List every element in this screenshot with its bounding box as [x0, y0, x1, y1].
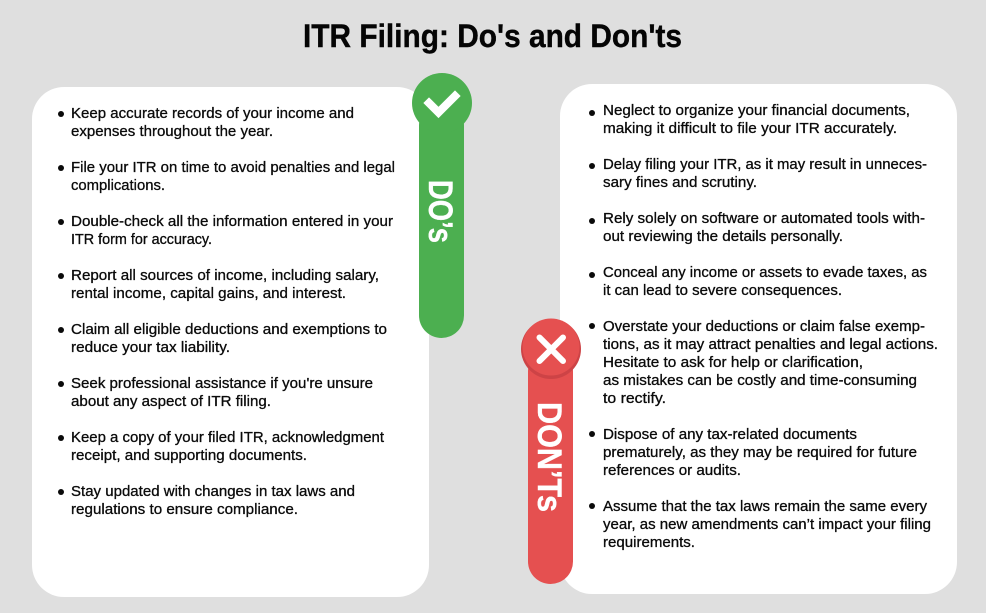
don'ts item 6: prematurely, as they may be required for future: [603, 445, 917, 461]
do's item 1: [58, 106, 354, 140]
do's item 8: regulations to ensure compliance.: [71, 502, 298, 518]
red circle badge: [522, 318, 580, 376]
don'ts item 7: [589, 499, 931, 551]
do's item 7: [58, 430, 384, 464]
don'ts item 4: it can lead to severe consequences.: [603, 283, 842, 299]
don'ts item 5: Hesitate to ask for help or clarification,: [603, 355, 863, 371]
don'ts item 6: references or audits.: [603, 463, 741, 479]
don'ts item 5: tions, as it may attract penalties and legal actions.: [603, 337, 938, 353]
title: ITR Filing: Do's and Don'ts: [303, 18, 682, 54]
panel: don'ts list: [560, 84, 957, 594]
do's item 5: reduce your tax liability.: [71, 340, 230, 356]
don'ts item 4: Conceal any income or assets to evade taxes, as: [603, 265, 927, 281]
do's item 2: complications.: [71, 178, 165, 194]
do's item 5: Claim all eligible deductions and exemptions to: [71, 322, 387, 338]
green DO's tab: [412, 73, 472, 338]
don'ts item 5: [589, 319, 938, 407]
do's item 3: [58, 214, 393, 248]
don'ts item 7: Assume that the tax laws remain the same every: [603, 499, 928, 515]
do's item 3: Double-check all the information entered in your: [71, 214, 393, 230]
don'ts item 7: year, as new amendments can’t impact your filing: [603, 517, 931, 533]
don'ts item 3: out reviewing the details personally.: [603, 229, 843, 245]
don'ts item 1: Neglect to organize your financial documents,: [603, 103, 910, 119]
panel: do's list: [32, 87, 429, 597]
do's item 4: rental income, capital gains, and interest.: [71, 286, 346, 302]
do's item 2: [58, 160, 395, 194]
don'ts item 2: sary fines and scrutiny.: [603, 175, 757, 191]
don'ts item 2: Delay filing your ITR, as it may result in unneces-: [603, 157, 927, 173]
do's item 6: about any aspect of ITR filing.: [71, 394, 271, 410]
red circle shadow: [521, 319, 581, 379]
don'ts item 5: as mistakes can be costly and time-consuming: [603, 373, 917, 389]
don'ts item 1: making it difficult to file your ITR accurately.: [603, 121, 897, 137]
don'ts item 7: requirements.: [603, 535, 695, 551]
icon: cross: [540, 338, 563, 361]
icon: check mark: [429, 96, 455, 112]
don'ts item 6: Dispose of any tax-related documents: [603, 427, 857, 443]
don'ts item 1: [589, 103, 910, 137]
do's item 1: expenses throughout the year.: [71, 124, 273, 140]
do's item 6: Seek professional assistance if you're unsure: [71, 376, 373, 392]
don'ts item 3: Rely solely on software or automated tools with-: [603, 211, 925, 227]
do's item 7: Keep a copy of your filed ITR, acknowledgment: [71, 430, 384, 446]
don'ts item 6: [589, 427, 917, 479]
do's item 2: File your ITR on time to avoid penalties and legal: [71, 160, 395, 176]
don'ts item 2: [589, 157, 927, 191]
don'ts item 5: Overstate your deductions or claim false exemp-: [603, 319, 925, 335]
DO's label: DO’s: [421, 180, 459, 243]
do's item 4: [58, 268, 379, 302]
do's item 1: Keep accurate records of your income and: [71, 106, 354, 122]
don'ts item 4: [589, 265, 927, 299]
don'ts item 3: [589, 211, 925, 245]
do's item 7: receipt, and supporting documents.: [71, 448, 307, 464]
do's item 5: [58, 322, 387, 356]
do's item 6: [58, 376, 373, 410]
do's item 3: ITR form for accuracy.: [71, 232, 212, 248]
green circle badge: [412, 73, 472, 133]
don'ts item 5: to rectify.: [603, 391, 666, 407]
do's item 4: Report all sources of income, including salary,: [71, 268, 379, 284]
do's item 8: [58, 484, 355, 518]
DON'Ts label: DON’Ts: [530, 402, 568, 512]
do's item 8: Stay updated with changes in tax laws and: [71, 484, 355, 500]
red DON'Ts tab: [521, 318, 581, 584]
